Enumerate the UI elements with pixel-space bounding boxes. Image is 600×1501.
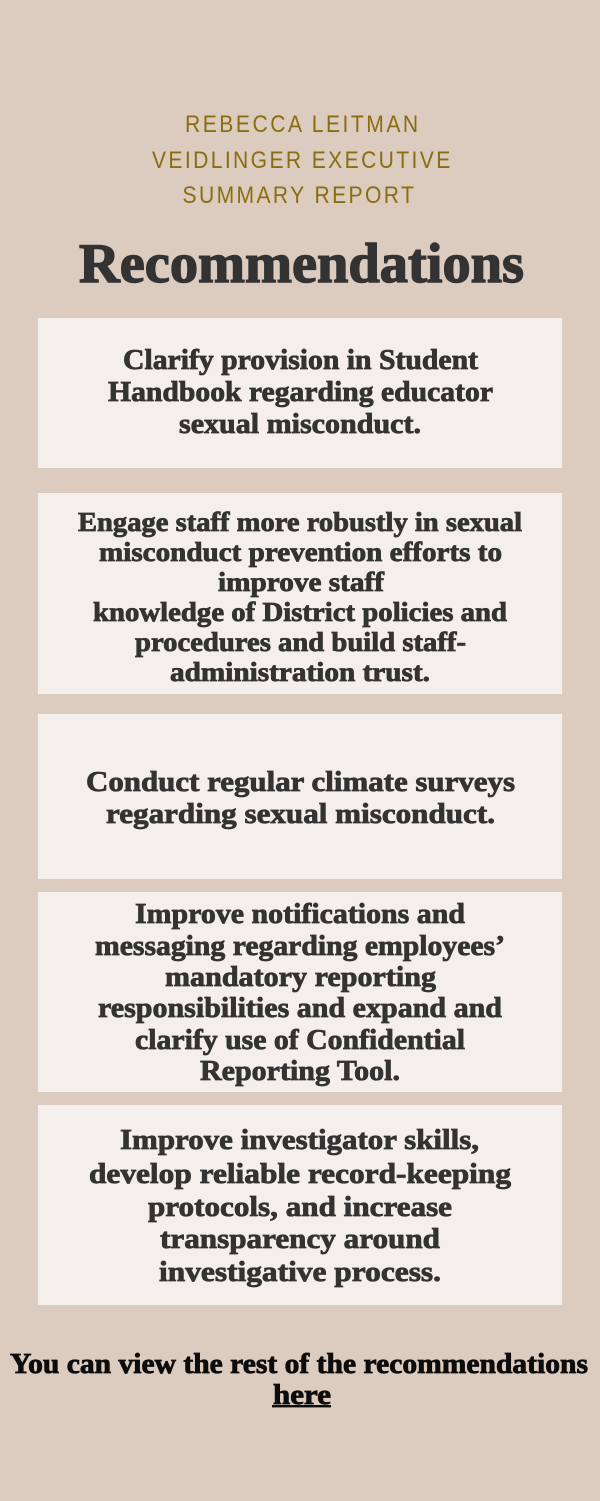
- panel: student handbook: [38, 318, 562, 468]
- subtitle: REBECCA LEITMAN: [185, 111, 418, 137]
- panel text: climate surveys: [86, 766, 515, 830]
- footer note: [10, 1349, 588, 1411]
- subtitle: SUMMARY REPORT: [182, 182, 414, 208]
- panel text: investigator skills: Improve investigator skills,: [120, 1124, 479, 1156]
- title: Recommendations: [79, 233, 524, 295]
- panel text: student handbook: [108, 344, 493, 440]
- panel text: staff engagement: [78, 507, 523, 687]
- panel text: student handbook: Clarify provision in Student: [123, 344, 478, 376]
- panel text: climate surveys: Conduct regular climate surveys: [86, 766, 515, 798]
- panel text: mandatory reporting: [95, 898, 505, 1087]
- panel: climate surveys: [38, 714, 562, 879]
- panel text: student handbook: sexual misconduct.: [179, 408, 421, 440]
- panel: staff engagement: [38, 493, 562, 694]
- panel text: investigator skills: transparency around: [160, 1223, 440, 1255]
- panel text: mandatory reporting: Reporting Tool.: [200, 1055, 400, 1087]
- panel text: investigator skills: investigative process.: [159, 1256, 441, 1288]
- panel text: mandatory reporting: mandatory reporting: [165, 961, 437, 993]
- panel: investigator skills: [38, 1105, 562, 1305]
- panel text: mandatory reporting: Improve notifications and: [135, 898, 465, 930]
- panel: mandatory reporting: [38, 892, 562, 1092]
- panel text: investigator skills: develop reliable record-keeping: [89, 1158, 512, 1190]
- panel text: mandatory reporting: responsibilities and expand and: [98, 992, 502, 1024]
- subtitle: [152, 111, 450, 208]
- panel text: staff engagement: misconduct prevention efforts to: [99, 537, 502, 567]
- footer note: here: [273, 1380, 331, 1411]
- panel text: staff engagement: knowledge of District policies and: [93, 597, 507, 627]
- panel text: investigator skills: protocols, and increase: [148, 1191, 452, 1223]
- panel text: mandatory reporting: messaging regarding employees’: [95, 930, 505, 962]
- panel text: staff engagement: administration trust.: [170, 657, 430, 687]
- subtitle: VEIDLINGER EXECUTIVE: [152, 147, 450, 173]
- panel text: mandatory reporting: clarify use of Confidential: [135, 1024, 465, 1056]
- panel text: staff engagement: procedures and build staff-: [135, 627, 466, 657]
- panel text: student handbook: Handbook regarding educator: [108, 376, 493, 408]
- panel text: staff engagement: improve staff: [218, 567, 385, 597]
- panel text: investigator skills: [89, 1124, 512, 1288]
- panel text: climate surveys: regarding sexual misconduct.: [106, 798, 495, 830]
- footer note: You can view the rest of the recommendations: [10, 1349, 588, 1380]
- panel text: staff engagement: Engage staff more robustly in sexual: [78, 507, 523, 537]
